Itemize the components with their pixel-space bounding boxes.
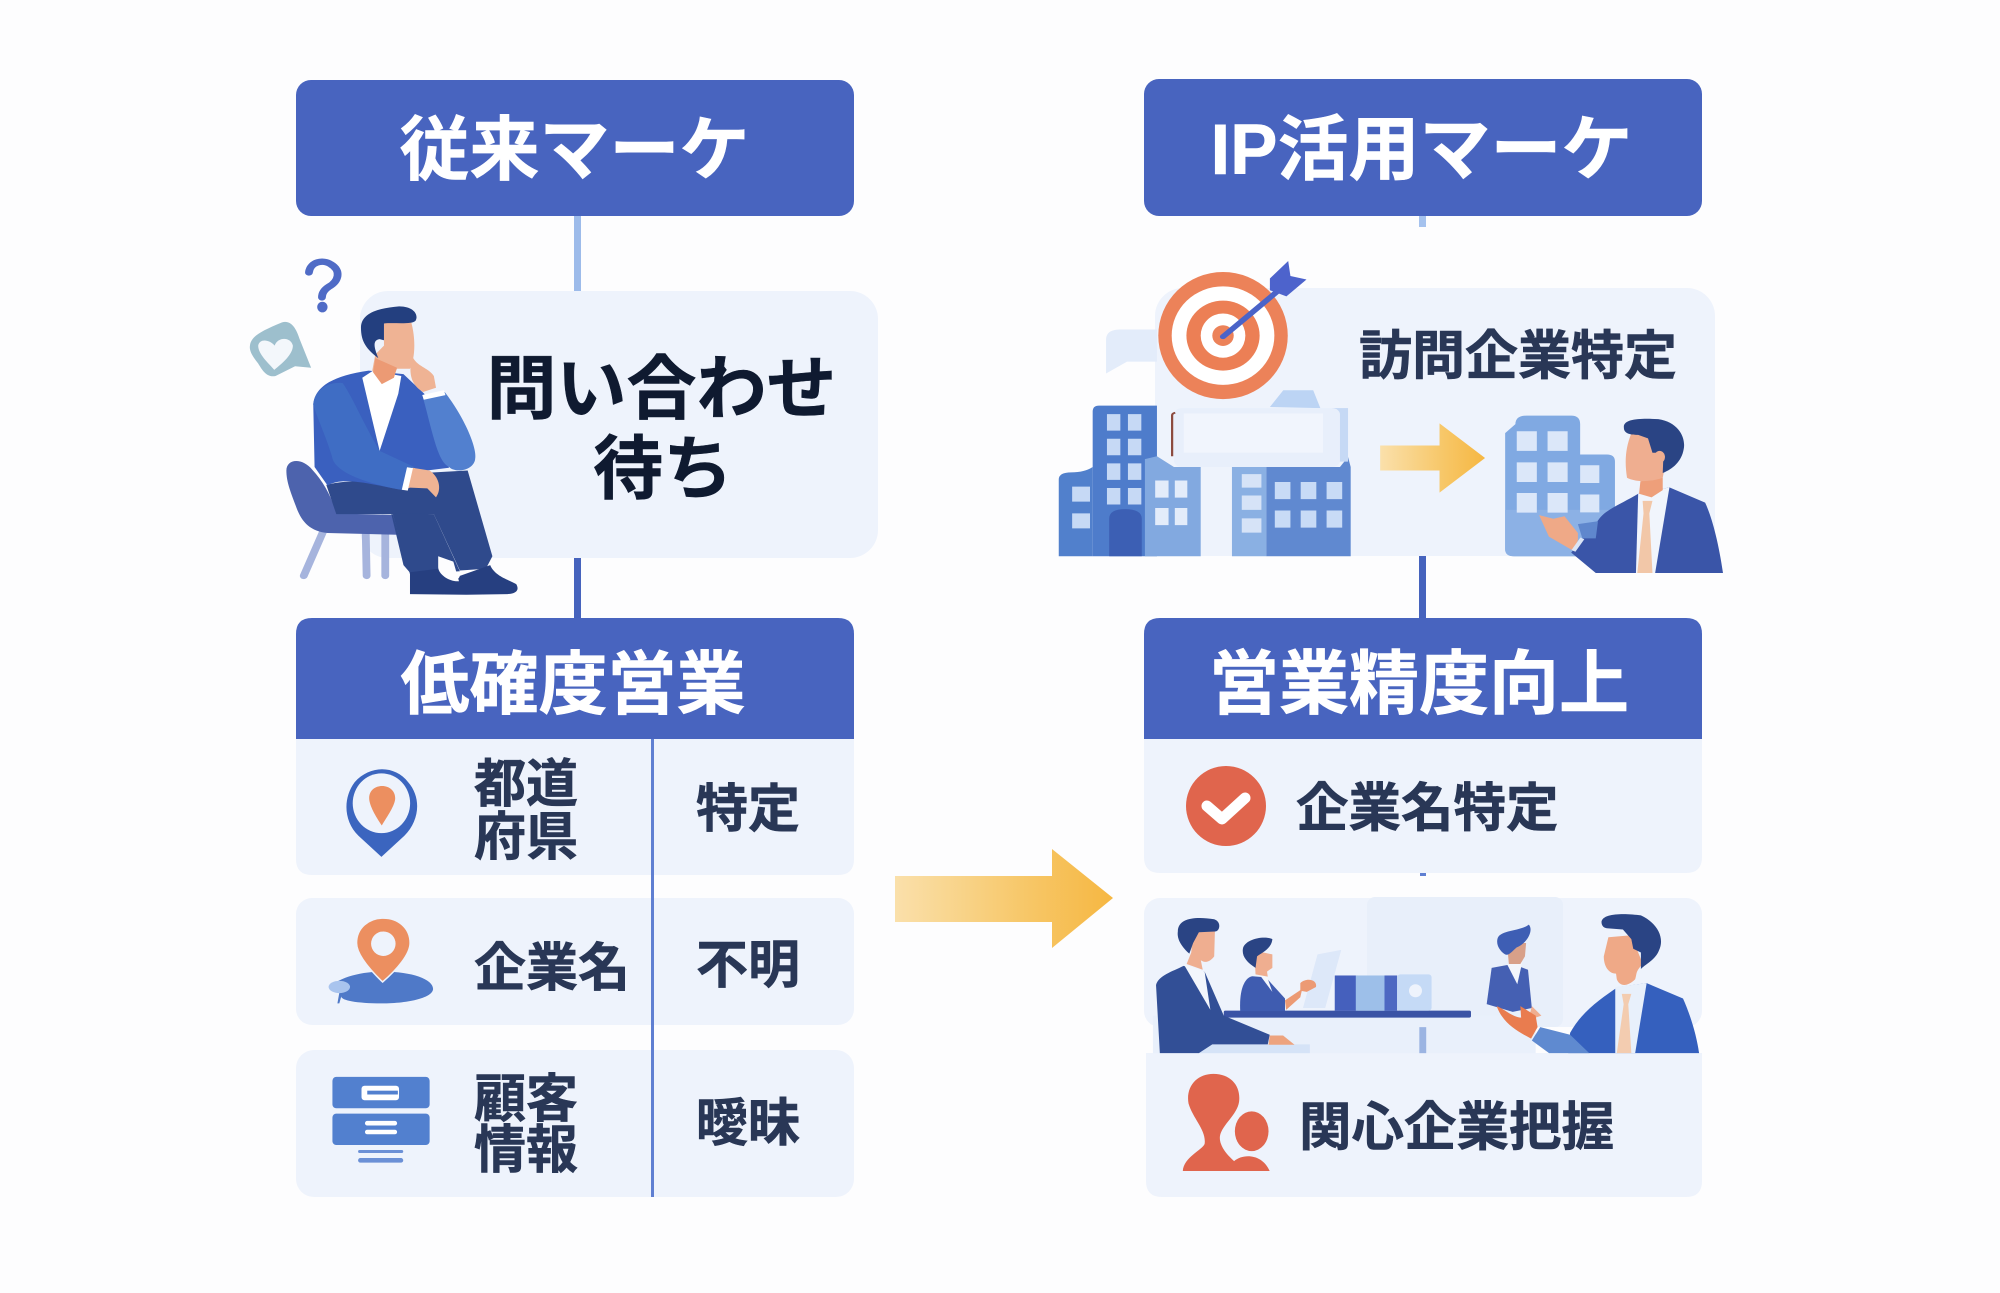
illustration: thinking man on chair [250,262,518,595]
person second [1240,938,1316,1011]
icon: question mark [309,262,338,312]
trousers and shoes [326,471,518,595]
heading: 従来マーケ [296,80,854,216]
heading text: 従来マーケ [400,111,750,189]
icon: database list [332,1077,430,1163]
illustration: business meeting [1153,914,1699,1053]
building group left [1059,406,1201,556]
arrow: small yellow [1380,423,1485,493]
illustration: target, buildings and businessman [1059,261,1723,573]
table [1153,950,1536,1053]
heading: IP活用マーケ [1144,79,1702,216]
header text: 営業精度向上 [1209,645,1629,723]
panel: 訪問企業特定 [1155,288,1715,556]
table row 3 background [296,1050,854,1197]
businessman [1539,419,1723,573]
header [1144,618,1702,739]
icon: target [1158,261,1307,399]
divider [651,739,654,1197]
building right [1505,416,1615,556]
arrow: large yellow [895,849,1113,948]
building group middle [1232,457,1351,556]
connector: right top light [1419,216,1426,227]
row 1 label: 都道 [474,756,578,814]
person left [1156,918,1295,1053]
pale card over buildings [1172,390,1348,467]
table row 1 background [296,735,854,875]
icon: red check circle [1186,766,1266,846]
icon: location with person [329,918,433,1003]
panel: 問い合わせ待ち [360,291,878,558]
header text: 低確度営業 [400,646,746,723]
table header [296,618,854,739]
row 1 value: 特定 [696,781,800,839]
panel text: 問い合わせ [486,350,836,428]
panel text line 2: 待ち [593,430,733,508]
person right [1497,914,1699,1053]
row 1 background [1144,735,1702,873]
head and hand [361,306,439,497]
panel: 低確度営業 table [296,618,854,1197]
row 1 label line 2: 府県 [474,809,578,867]
connector: right middle dark [1419,556,1426,620]
heading text: IP活用マーケ [1210,111,1633,190]
row 2 value: 不明 [696,937,800,995]
icon: map pin in circle [346,769,417,857]
small connector tick [1420,873,1426,876]
icon: speech bubble with heart [250,322,311,376]
connector: left top light [574,216,581,292]
pale speech bubble [1106,330,1157,373]
row 3 background [1146,1053,1702,1197]
jacket [313,371,475,490]
row 1 text: 企業名特定 [1296,779,1559,838]
table row 2 background [296,898,854,1025]
panel text: 訪問企業特定 [1359,327,1677,386]
row 3 value: 曖昧 [696,1095,800,1153]
row 2 pale screen [1367,897,1563,1027]
row 3 label line 2: 情報 [474,1122,578,1180]
row 2 label: 企業名 [474,940,630,998]
row 3 text: 関心企業把握 [1299,1098,1614,1157]
person standing back [1487,925,1541,1018]
icon: red people [1183,1074,1270,1171]
chair [286,461,399,576]
panel: 営業精度向上 [1144,618,1702,1197]
connector: left middle dark [574,558,581,620]
row 3 label: 顧客 [474,1071,578,1129]
row 2 background [1144,898,1702,1027]
